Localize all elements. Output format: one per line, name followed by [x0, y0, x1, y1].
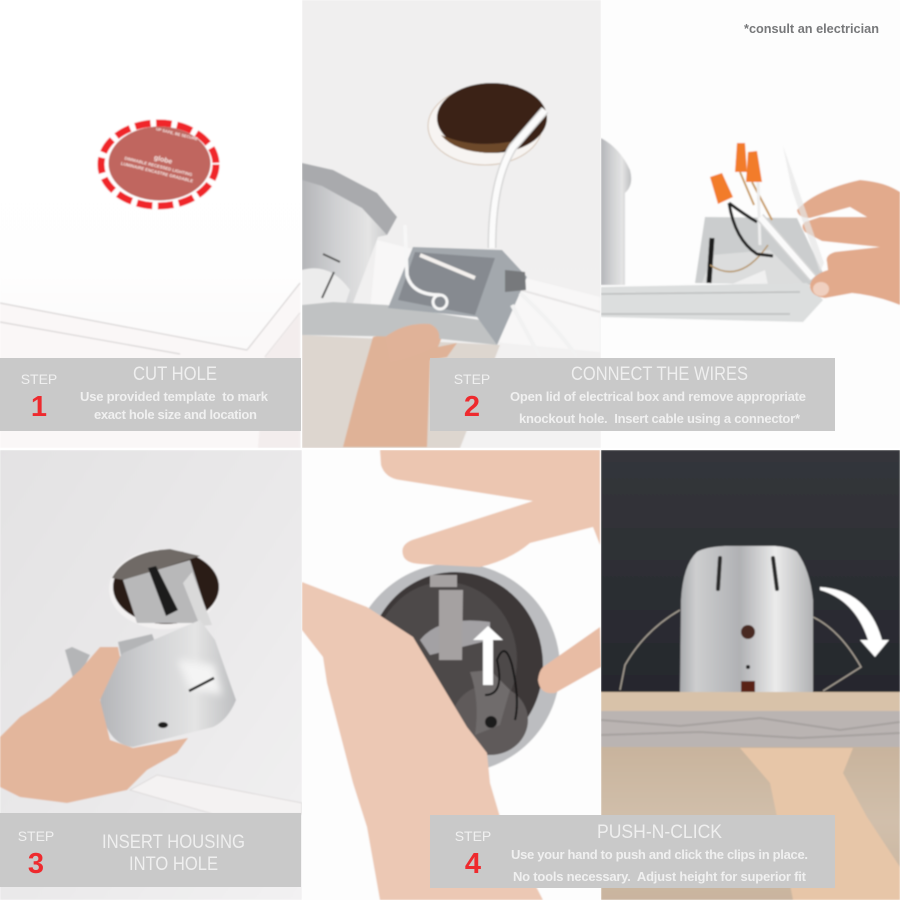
box lid: [785, 154, 824, 271]
hand holding can: [0, 647, 188, 803]
thumbnail: [813, 282, 829, 296]
caption: step 3: INTO HOLE: [129, 854, 218, 875]
template sticker: LUMINAIRE ENCASTRE GRADABLE: [120, 161, 194, 184]
ceiling board: [601, 692, 900, 747]
can front view: [680, 546, 813, 692]
caption: step 3: STEP: [18, 828, 54, 844]
caption: step 2: [430, 358, 835, 431]
note: consult an electrician: *consult an electrician: [744, 21, 879, 36]
large lower hand: [302, 582, 543, 900]
electrical box: [695, 217, 823, 285]
template sticker: globe: [153, 155, 173, 166]
caption: step 3: 3: [28, 848, 44, 880]
ceiling hole: [428, 83, 547, 165]
forearm below board: [740, 748, 900, 900]
caption: step 2: knockout hole. Insert cable using a connector*: [519, 411, 801, 426]
upper hand: [380, 450, 600, 567]
white up arrow: [473, 626, 503, 685]
caption: step 2: Open lid of electrical box and remove appropriate: [510, 389, 806, 404]
caption: step 1: Use provided template to mark: [80, 389, 269, 404]
mounting rail: [302, 302, 497, 345]
tilted can: [100, 620, 236, 747]
can seen from below: [368, 564, 560, 768]
template sticker: [101, 120, 216, 206]
spring clip: [430, 575, 463, 660]
template sticker: UP SAFE, BE SECURE: [155, 126, 199, 141]
panel: push clips photo: [302, 450, 601, 900]
hand holding lid: [797, 180, 900, 305]
wires: [729, 172, 813, 278]
caption: step 1: STEP: [21, 371, 57, 387]
caption: step 2: STEP: [454, 371, 490, 387]
hole in ceiling: [109, 549, 219, 629]
mounting rail: [601, 283, 823, 322]
white cable: [492, 110, 545, 248]
recessed can: [302, 163, 397, 305]
caption: step 4: Use your hand to push and click the clips in place.: [511, 847, 808, 862]
caption: step 1: CUT HOLE: [133, 364, 217, 385]
caption: step 1: 1: [31, 391, 47, 423]
junction box: [388, 246, 528, 345]
caption: step 4: PUSH-N-CLICK: [597, 822, 722, 843]
lower cables: [510, 304, 515, 310]
caption: step 3: INSERT HOUSING: [102, 832, 245, 853]
thumb: [386, 323, 440, 339]
panel: insert housing photo: [0, 450, 302, 900]
caption: step 4: 4: [465, 848, 481, 880]
panel: cut hole photo: [0, 118, 300, 448]
caption: step 1: [0, 358, 301, 431]
panel: finished height photo: [601, 450, 900, 900]
template sticker: DIMMABLE RECESSED LIGHTING: [124, 155, 193, 177]
bracket inside hole: [123, 560, 212, 626]
thumb on right: [538, 627, 601, 693]
caption: step 4: STEP: [455, 828, 491, 844]
wire spring clips: [620, 610, 861, 691]
back flange: [64, 634, 154, 677]
can housing: [601, 138, 631, 285]
caption: step 2: 2: [464, 391, 480, 423]
panel: connect housing photo: [302, 0, 601, 448]
caption: step 4: [430, 815, 835, 888]
orange wire connectors: [710, 143, 762, 204]
hand behind box: [343, 323, 457, 447]
caption: step 3: [0, 813, 301, 887]
caption: step 4: No tools necessary. Adjust height for superior fit: [513, 869, 807, 884]
panel: wires photo: [601, 138, 900, 322]
ceiling molding: [130, 780, 302, 814]
caption: step 1: exact hole size and location: [94, 407, 257, 422]
caption: step 2: CONNECT THE WIRES: [571, 364, 748, 385]
curved arrow: [820, 587, 889, 657]
